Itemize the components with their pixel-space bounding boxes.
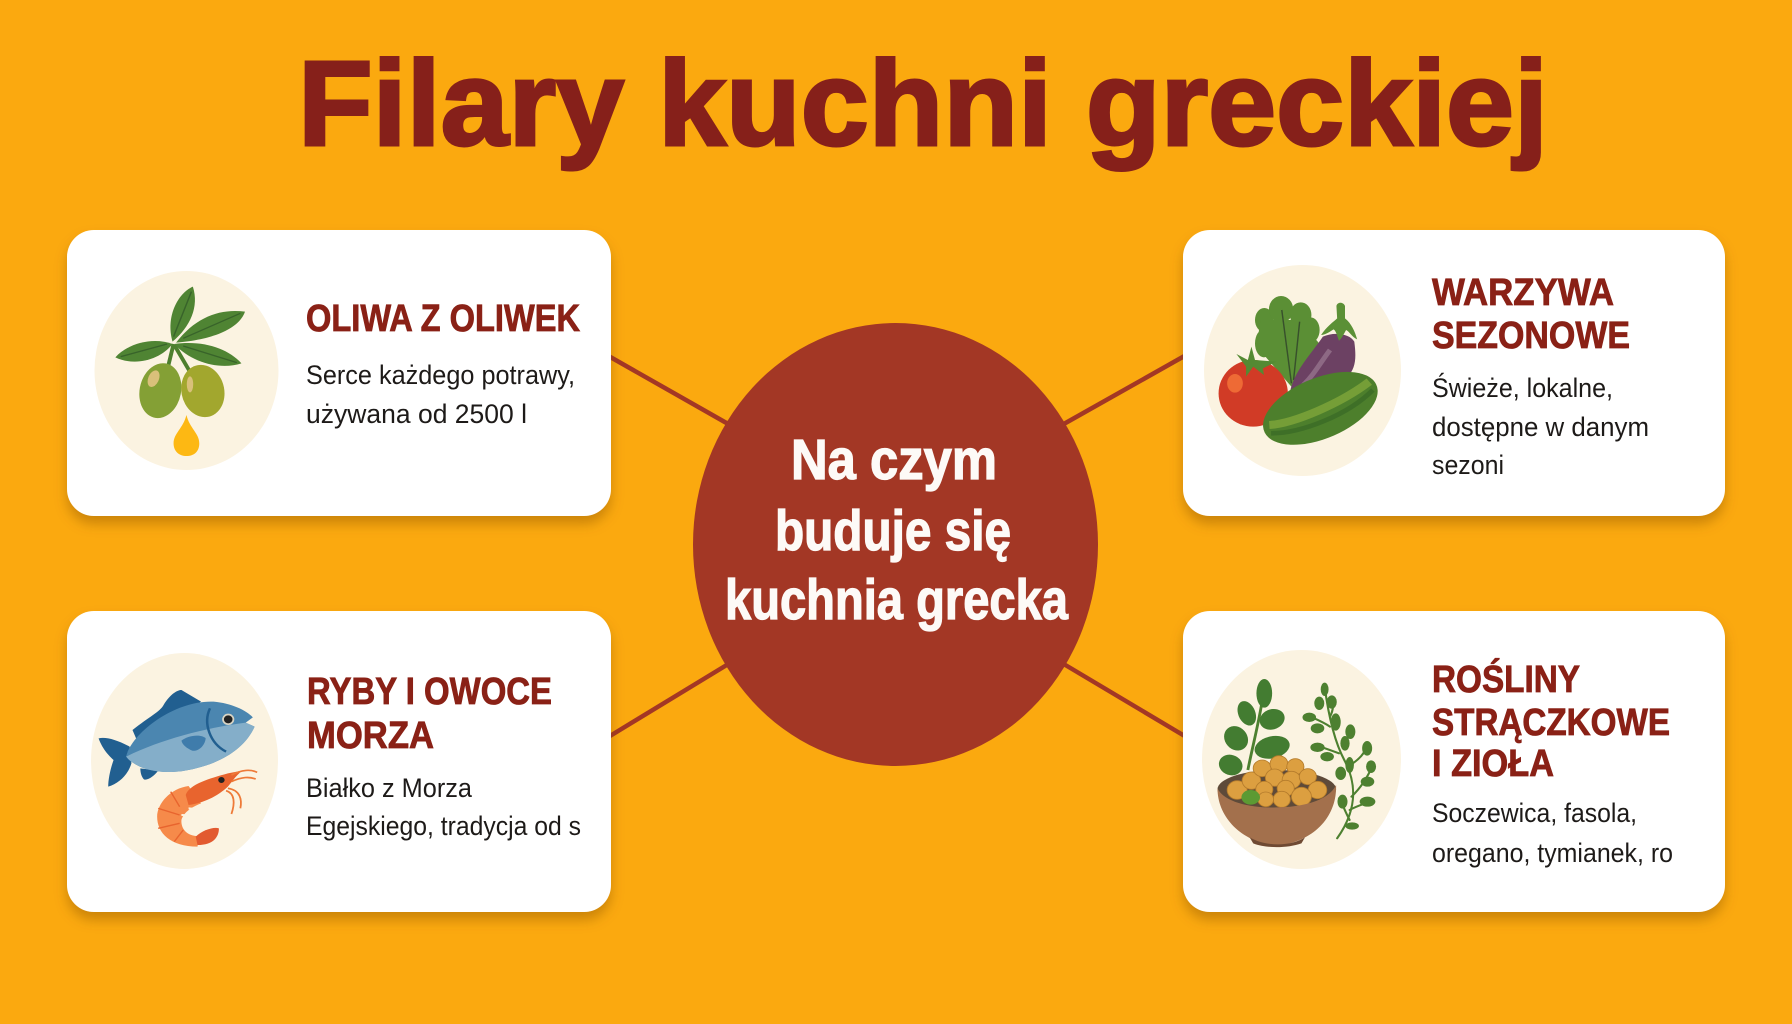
panel: ryby i owoce morza (67, 611, 611, 912)
heading (307, 671, 552, 757)
description: Serce każdego potrawy, (306, 360, 575, 390)
central text: Na czym (791, 428, 997, 492)
description: Świeże, lokalne, (1432, 371, 1613, 403)
description (306, 360, 575, 429)
description: Soczewica, fasola, (1432, 798, 1637, 828)
description (1432, 371, 1649, 480)
central text (725, 428, 1069, 632)
description: Białko z Morza (306, 773, 473, 803)
description: dostępne w danym (1432, 412, 1649, 442)
heading: I ZIOŁA (1432, 743, 1554, 785)
heading (1432, 657, 1670, 785)
heading (1432, 272, 1630, 357)
central circle (693, 323, 1098, 766)
description: sezoni (1432, 450, 1504, 480)
heading: RYBY I OWOCE (307, 671, 552, 713)
description: używana od 2500 l (306, 399, 527, 429)
description: oregano, tymianek, ro (1432, 838, 1673, 868)
description: Egejskiego, tradycja od s (306, 811, 581, 841)
central text: buduje się (775, 499, 1011, 563)
central text: kuchnia grecka (725, 568, 1069, 632)
panel: oliwa z oliwek (67, 230, 611, 516)
description (306, 773, 581, 841)
icon: olive branch (94, 271, 278, 470)
heading: SEZONOWE (1432, 315, 1630, 357)
heading: ROŚLINY (1432, 657, 1580, 701)
heading: STRĄCZKOWE (1432, 702, 1670, 744)
title: Filary kuchni greckiej (298, 35, 1548, 171)
panel: warzywa sezonowe (1183, 230, 1725, 516)
heading: OLIWA Z OLIWEK (306, 298, 580, 340)
icon: bowl and herbs (1202, 650, 1401, 869)
icon: vegetables (1204, 265, 1401, 476)
icon: fish and shrimp (91, 653, 278, 869)
panel: rośliny strączkowe i zioła (1183, 611, 1725, 912)
connector lines (605, 354, 1188, 739)
heading: MORZA (307, 715, 434, 757)
heading: WARZYWA (1432, 272, 1614, 314)
description (1432, 798, 1673, 868)
